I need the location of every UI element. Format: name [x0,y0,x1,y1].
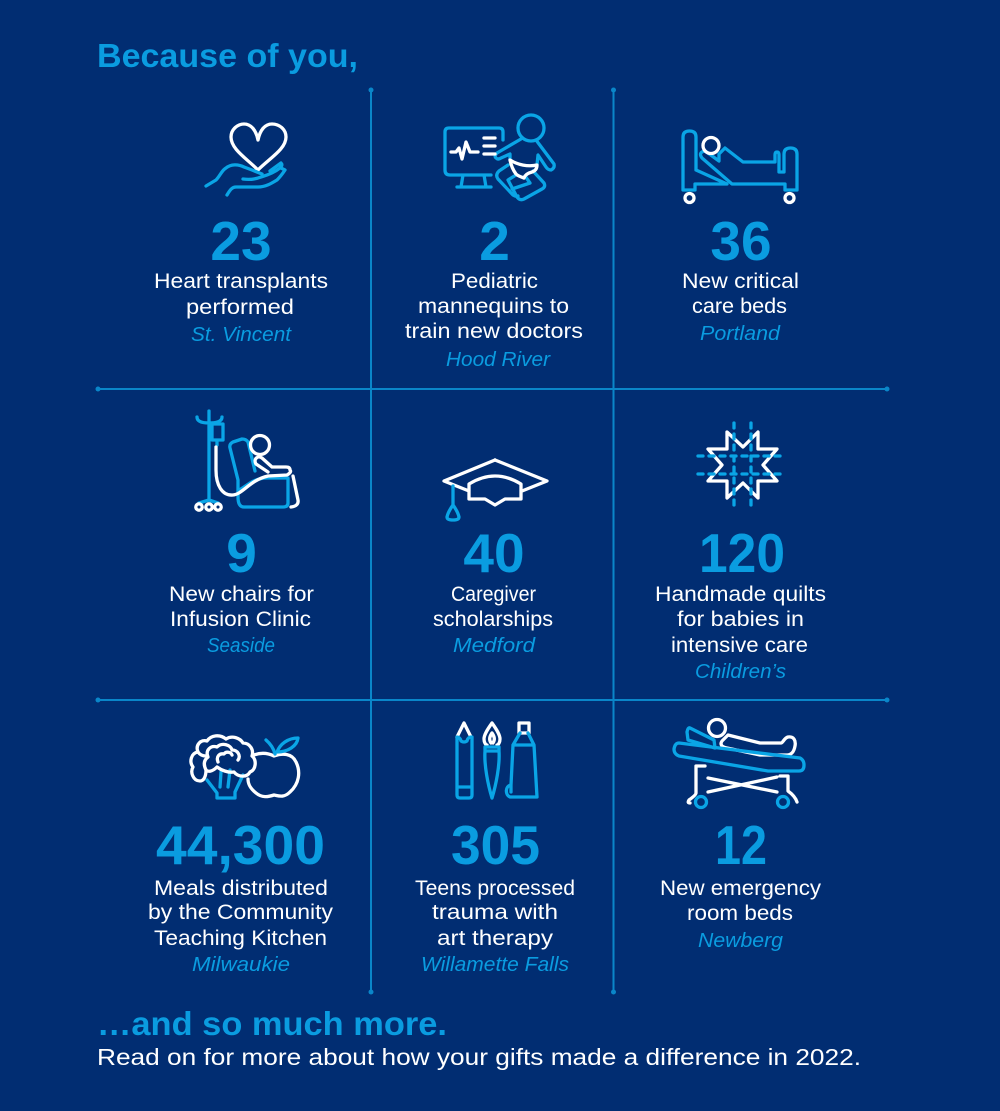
description: New emergency [660,876,821,900]
location: Portland [700,323,781,345]
number: 120 [699,522,785,584]
number: 36 [710,210,772,272]
description: Caregiver [451,582,536,606]
number: 12 [715,814,767,876]
panel: handmade quilts [655,423,826,683]
panel: art therapy: art therapy [437,926,553,950]
icon: heart in hand [206,124,286,195]
icon: monitor and baby mannequin [445,115,554,200]
panel: heart transplants: performed [186,295,294,319]
location: Hood River [446,349,551,371]
panel: infusion chairs: Infusion Clinic [170,607,311,631]
panel: emergency room beds: room beds [687,901,793,925]
panel: pediatric mannequins: train new doctors [405,319,583,343]
description: Pediatric [451,269,538,293]
number: 40 [463,522,525,584]
panel: infusion chairs [169,411,314,657]
panel: critical care beds [682,131,799,345]
number: 9 [226,522,257,584]
icon: quilt star [698,423,785,507]
location: Medford [453,635,536,657]
panel: community meals: by the Community [148,900,333,924]
closing heading: …and so much more. [97,1005,447,1042]
description: Teens processed [415,876,575,900]
location: Milwaukie [192,954,290,976]
icon: infusion chair [196,411,298,510]
title: Because of you, [97,37,358,74]
description: Handmade quilts [655,582,826,606]
icon: broccoli and apple [191,736,299,798]
panel: pediatric mannequins: mannequins to [418,294,569,318]
icon: stretcher [674,720,804,808]
closing text: Read on for more about how your gifts made a difference in 2022. [97,1044,861,1070]
location: Newberg [698,930,783,952]
panel: community meals [148,736,333,976]
location: St. Vincent [191,324,292,346]
panel: art therapy: trauma with [432,900,558,924]
icon: hospital bed [683,131,797,202]
number: 2 [479,210,510,272]
grid dividers [96,88,890,994]
location: Seaside [207,635,275,657]
number: 23 [210,210,272,272]
panel: community meals: Teaching Kitchen [154,926,327,950]
panel: critical care beds: care beds [692,294,787,318]
panel: scholarships: scholarships [433,607,553,631]
panel: scholarships [433,460,553,657]
description: Meals distributed [154,876,328,900]
panel: pediatric mannequins [405,115,583,371]
panel: emergency room beds [660,720,821,952]
number: 44,300 [156,814,325,876]
icon: graduation cap [444,460,547,520]
description: New chairs for [169,582,314,606]
panel: handmade quilts: intensive care [671,633,808,657]
description: New critical [682,269,799,293]
panel: heart transplants [154,124,328,346]
number: 305 [451,814,540,876]
icon: pencil, brush and paint tube [457,723,537,798]
location: Willamette Falls [421,954,569,976]
description: Heart transplants [154,269,328,293]
panel: handmade quilts: for babies in [677,607,804,631]
location: Children’s [695,661,786,683]
panel: art therapy [415,723,575,976]
